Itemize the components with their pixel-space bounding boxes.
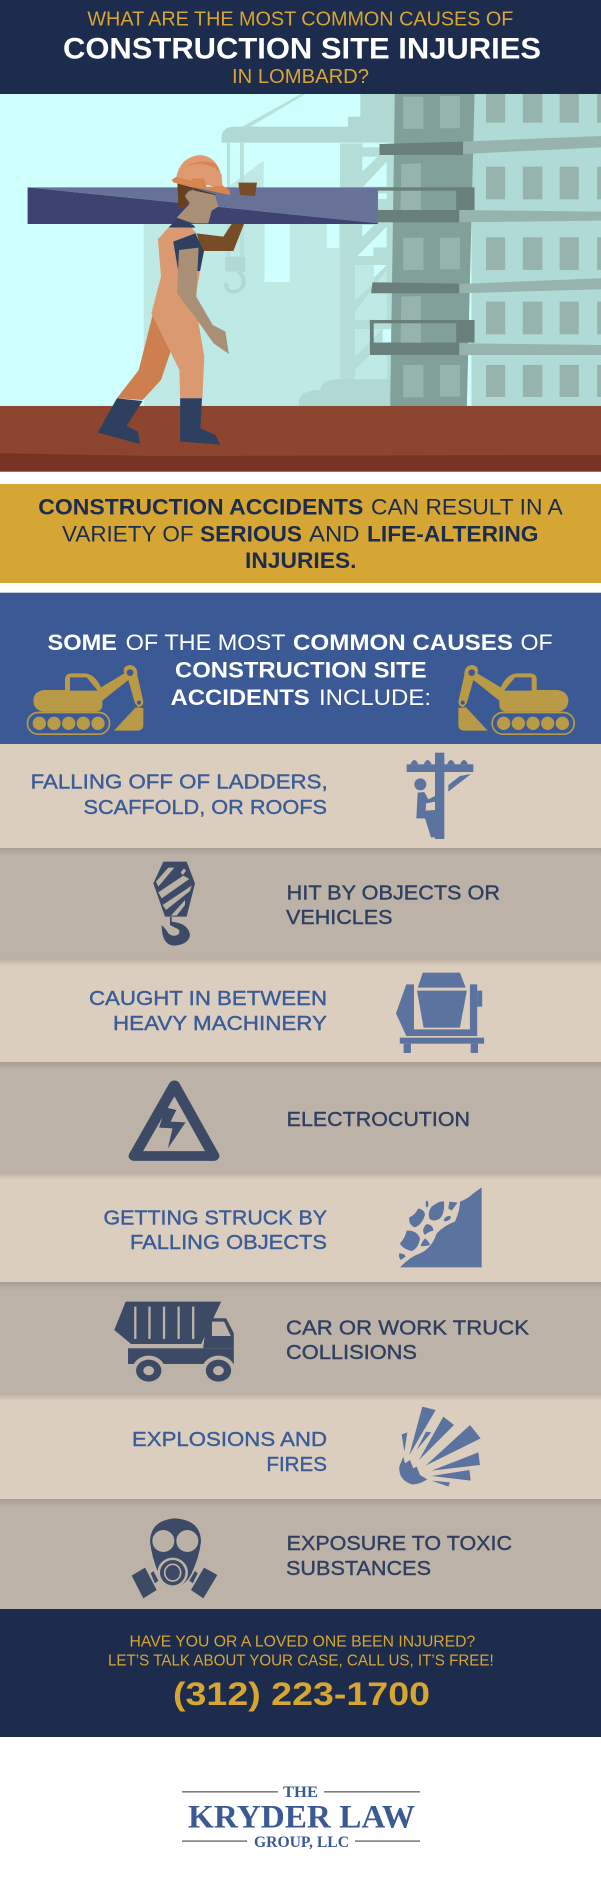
icon: worker climbing utility pole	[407, 753, 473, 839]
statement text: INJURIES.	[245, 548, 356, 573]
logo: The Kryder Law Group, LLC: THE	[283, 1784, 318, 1801]
intro text: COMMON CAUSES	[293, 630, 513, 655]
icon: dump truck	[114, 1302, 235, 1384]
icon: explosion burst	[399, 1407, 481, 1487]
icon: cement mixer	[396, 973, 484, 1053]
row 6 label: COLLISIONS	[286, 1341, 417, 1364]
blue intro band	[0, 593, 601, 744]
row 2 label	[286, 881, 500, 929]
row 1 label: FALLING OFF OF LADDERS,	[31, 770, 328, 793]
row 4 label: ELECTROCUTION	[287, 1108, 470, 1131]
row 3: caught in machinery	[0, 958, 601, 1062]
row 5 label: FALLING OBJECTS	[130, 1231, 327, 1254]
heading line: construction site injuries: CONSTRUCTION SITE INJURIES	[63, 32, 541, 65]
row 5: falling objects	[0, 1172, 601, 1282]
row 8 label	[286, 1532, 512, 1580]
statement text: AND	[309, 521, 360, 546]
row 5 label	[104, 1206, 327, 1254]
worker head, helmet and raised arm	[168, 155, 257, 251]
call to action text: HAVE YOU OR A LOVED ONE BEEN INJURED?	[130, 1634, 475, 1651]
intro text: OF THE MOST	[126, 630, 286, 655]
statement text: CAN RESULT IN A	[371, 495, 563, 520]
row 7 label	[132, 1428, 327, 1476]
intro text: OF	[520, 630, 553, 655]
row 1 label	[31, 770, 328, 819]
row 2 label: HIT BY OBJECTS OR	[287, 881, 500, 904]
row 6: truck collisions	[0, 1282, 601, 1393]
row 2: hit by objects	[0, 848, 601, 958]
worker body	[98, 228, 220, 445]
row 8 label: SUBSTANCES	[286, 1557, 431, 1580]
statement text: CONSTRUCTION ACCIDENTS	[38, 495, 363, 520]
intro text: ACCIDENTS	[170, 685, 310, 710]
row 3 label	[89, 987, 327, 1035]
row 7: explosions	[0, 1393, 601, 1499]
row 3 label: CAUGHT IN BETWEEN	[89, 987, 327, 1010]
statement text: SERIOUS	[200, 521, 302, 546]
call to action text	[108, 1634, 494, 1669]
row 4: electrocution	[0, 1062, 601, 1172]
intro text: CONSTRUCTION SITE	[175, 657, 427, 682]
row 8: toxic exposure	[0, 1499, 601, 1609]
logo: The Kryder Law Group, LLC: GROUP, LLC	[254, 1834, 349, 1851]
icon: high voltage warning triangle	[134, 1085, 214, 1156]
background city and crane	[144, 94, 396, 406]
row 6 label: CAR OR WORK TRUCK	[286, 1316, 529, 1339]
row 6 label	[286, 1316, 529, 1364]
icon: crane hook	[153, 862, 195, 946]
intro text: INCLUDE:	[319, 685, 431, 710]
logo: The Kryder Law Group, LLC	[182, 1784, 420, 1851]
call to action text: LET’S TALK ABOUT YOUR CASE, CALL US, IT’S FREE!	[108, 1652, 494, 1669]
row 7 label: EXPLOSIONS AND	[132, 1428, 327, 1451]
logo: The Kryder Law Group, LLC: KRYDER LAW	[188, 1799, 415, 1835]
icon: rockslide	[399, 1187, 482, 1267]
statement text	[38, 495, 563, 573]
row 8 label: EXPOSURE TO TOXIC	[287, 1532, 512, 1555]
ground	[0, 406, 601, 472]
crane tower lattice	[340, 143, 395, 380]
steel beam	[28, 187, 378, 224]
intro text	[48, 630, 553, 710]
statement text: LIFE-ALTERING	[367, 521, 538, 546]
row 5 label: GETTING STRUCK BY	[104, 1206, 327, 1229]
row 2 label: VEHICLES	[286, 906, 392, 929]
icon: excavator left	[27, 665, 143, 734]
gold statement band	[0, 484, 601, 583]
row 1 label: SCAFFOLD, OR ROOFS	[84, 796, 327, 819]
phone number: (312) 223-1700	[173, 1676, 430, 1712]
heading line: what are the most common causes of: WHAT ARE THE MOST COMMON CAUSES OF	[87, 7, 513, 30]
background rubble bumps	[299, 379, 395, 406]
worker front arm and shirt strap	[173, 233, 229, 354]
row 1: falling	[0, 744, 601, 848]
heading line: in Lombard: IN LOMBARD?	[232, 65, 369, 88]
hero illustration: worker carrying beam at building site	[0, 94, 601, 472]
row 7 label: FIRES	[266, 1453, 327, 1476]
intro text: SOME	[48, 630, 117, 655]
statement text: VARIETY OF	[62, 521, 194, 546]
icon: excavator right	[458, 665, 574, 734]
icon: gas mask	[132, 1518, 217, 1598]
row 3 label: HEAVY MACHINERY	[113, 1012, 327, 1035]
foreground building	[370, 94, 601, 406]
footer call to action	[0, 1609, 601, 1737]
header panel	[0, 0, 601, 94]
